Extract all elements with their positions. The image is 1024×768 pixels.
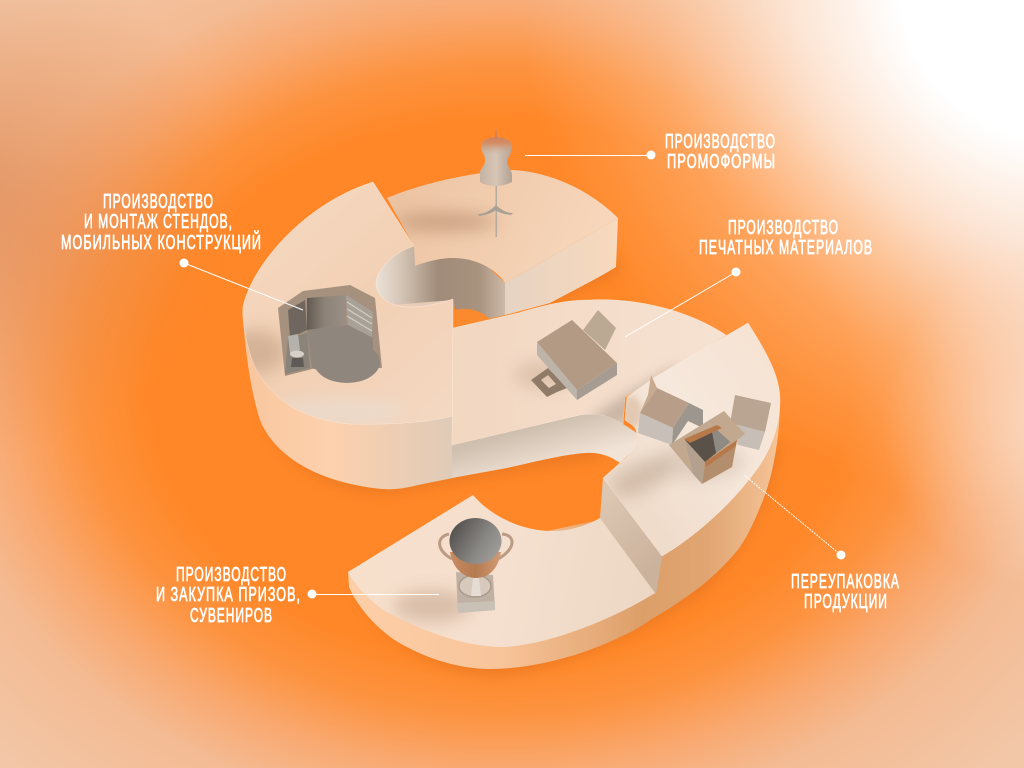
icon: cardboard boxes: [638, 375, 771, 484]
segment: upper-right side wall: [505, 218, 618, 315]
icon: exhibition stand: [278, 285, 382, 383]
top: printer piece: [452, 300, 726, 445]
label: printed materials: ПРОИЗВОДСТВО: [728, 217, 839, 239]
label: prizes: ПРОИЗВОДСТВО: [176, 564, 287, 586]
label: printed materials: [625, 217, 873, 337]
icon: trophy: [440, 518, 512, 613]
segment: outer front wall: [348, 400, 780, 669]
ground shadow: [262, 255, 782, 676]
label: repacking: ПРОДУКЦИИ: [804, 591, 888, 613]
top: trophy piece: [348, 495, 655, 647]
top: upper-left piece: [225, 182, 453, 426]
label: promo forms: ПРОИЗВОДСТВО: [665, 131, 776, 153]
hole: orange gap: [455, 309, 490, 328]
icon: mannequin: [478, 127, 513, 237]
label: promo forms: [525, 131, 776, 173]
segment: inner curved wall: [372, 240, 505, 319]
label: repacking: ПЕРЕУПАКОВКА: [791, 571, 900, 593]
segment: printer inner wall: [452, 414, 637, 478]
label: stands: ПРОИЗВОДСТВО: [103, 191, 214, 213]
label: stands: [61, 191, 303, 310]
label: repacking: [744, 475, 900, 613]
box: closed left: [638, 375, 703, 445]
icon: printer: [515, 310, 617, 400]
label: prizes: И ЗАКУПКА ПРИЗОВ,: [156, 584, 301, 606]
3D letter S platform: [225, 170, 782, 676]
label: promo forms: ПРОМОФОРМЫ: [667, 151, 776, 173]
segment: left side wall: [243, 300, 453, 489]
top: boxes piece: [603, 323, 780, 556]
box: right: [730, 395, 771, 450]
label: stands: МОБИЛЬНЫХ КОНСТРУКЦИЙ: [61, 230, 262, 254]
label: prizes: [156, 564, 439, 627]
segment: step wall: [600, 478, 662, 595]
box: open centre: [669, 411, 745, 484]
label: stands: И МОНТАЖ СТЕНДОВ,: [84, 211, 233, 233]
top: mannequin piece: [387, 170, 618, 283]
label: printed materials: ПЕЧАТНЫХ МАТЕРИАЛОВ: [699, 237, 873, 259]
label: prizes: СУВЕНИРОВ: [190, 605, 273, 627]
